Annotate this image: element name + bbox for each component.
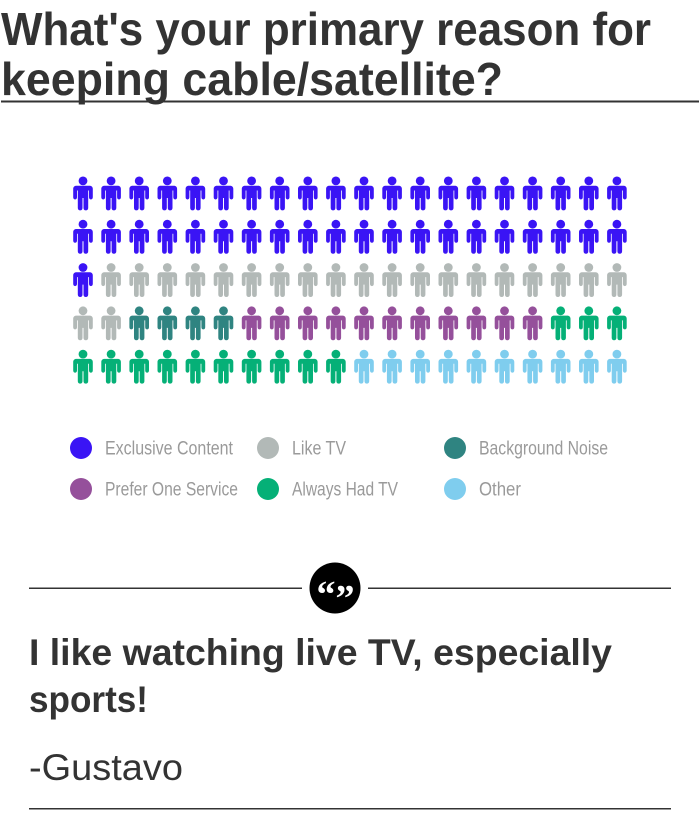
legend item: prefer one service — [70, 478, 238, 500]
legend item: like TV: Like TV — [292, 438, 346, 460]
quote text: sports! — [29, 679, 148, 720]
row 2: exclusive content — [73, 220, 627, 254]
legend — [70, 437, 608, 500]
quote text: I like watching live TV, especially — [29, 632, 612, 673]
legend item: background noise — [444, 437, 608, 460]
quote text — [29, 632, 612, 720]
title: keeping cable/satellite? — [1, 53, 503, 105]
legend item: background noise: Background Noise — [479, 438, 608, 460]
legend item: prefer one service: Prefer One Service — [105, 480, 238, 500]
legend item: like TV — [257, 437, 346, 460]
row 1: exclusive content — [73, 176, 627, 210]
title: What's your primary reason for — [1, 3, 651, 55]
legend item: exclusive content: Exclusive Content — [105, 438, 234, 460]
icon: quotation marks: ” — [336, 578, 354, 620]
icon: quotation marks: “ — [316, 574, 336, 616]
legend item: other — [444, 478, 522, 500]
row 5: always had TV and other — [73, 350, 627, 384]
legend item: always had TV — [257, 478, 398, 500]
quote attribution: -Gustavo — [29, 747, 183, 788]
row 3: exclusive content and like TV — [73, 263, 627, 297]
legend item: always had TV: Always Had TV — [292, 480, 398, 500]
pictogram chart — [73, 176, 627, 384]
row 4: like TV, background noise, prefer one service, always had TV — [73, 306, 627, 340]
title — [1, 3, 651, 105]
legend item: exclusive content — [70, 437, 234, 460]
icon: quotation marks — [310, 562, 360, 620]
legend item: other: Other — [479, 480, 522, 500]
